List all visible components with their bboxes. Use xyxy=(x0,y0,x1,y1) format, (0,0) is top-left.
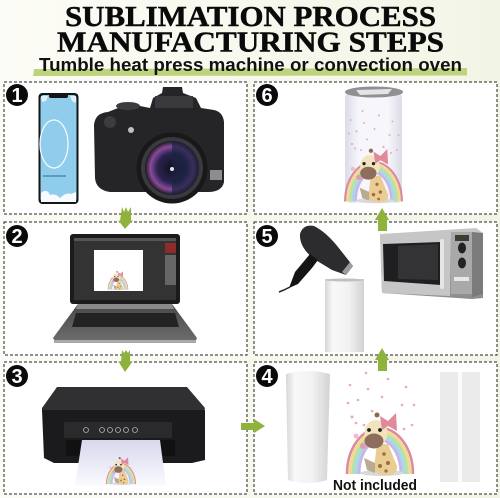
arrow: step 3 to 4 xyxy=(241,419,265,433)
panel: step 3 printing xyxy=(4,362,247,494)
panel: step 6 finished tumbler xyxy=(254,82,497,214)
arrow: step 1 to 2 xyxy=(118,207,133,229)
step number 5: 5 xyxy=(261,226,273,248)
step number 1 xyxy=(6,84,28,107)
icon: shrink sleeve xyxy=(286,371,330,483)
step number 4: 4 xyxy=(261,366,273,388)
step number 6: 6 xyxy=(261,85,273,107)
not included label: Not included xyxy=(333,477,417,494)
arrow: step 5 to 6 xyxy=(375,208,389,231)
step number 5 xyxy=(256,225,278,248)
step number 3 xyxy=(6,365,28,388)
icon: laptop xyxy=(53,234,197,343)
panel: step 1 capture xyxy=(4,82,247,214)
step number 2: 2 xyxy=(11,226,23,248)
arrow: step 4 to 5 xyxy=(375,348,389,371)
arrow: step 2 to 3 xyxy=(118,350,133,372)
panel: step 4 materials xyxy=(254,362,497,494)
icon: shrink wrap film xyxy=(440,372,480,482)
step number 4 xyxy=(256,365,278,388)
icon: microwave oven xyxy=(380,228,483,299)
icon: DSLR camera xyxy=(94,87,224,204)
panel: step 2 design on laptop xyxy=(4,222,247,355)
subtitle with green highlight: Tumble heat press machine or convection oven xyxy=(39,54,462,75)
step number 2 xyxy=(6,225,28,248)
panel: step 5 heating xyxy=(254,222,497,355)
step number 3: 3 xyxy=(11,366,23,388)
title: MANUFACTURING STEPS xyxy=(57,26,444,58)
icon: printer xyxy=(42,387,205,486)
title: SUBLIMATION PROCESS xyxy=(65,1,436,33)
title xyxy=(57,1,444,58)
icon: smartphone xyxy=(38,93,78,204)
step number 6 xyxy=(256,84,278,107)
icon: hair dryer xyxy=(279,226,353,292)
sublimation giraffe artwork xyxy=(347,372,415,476)
icon: shrink sleeve on tumbler xyxy=(325,278,364,352)
icon: printed tumbler xyxy=(345,86,403,203)
step number 1: 1 xyxy=(11,85,23,107)
